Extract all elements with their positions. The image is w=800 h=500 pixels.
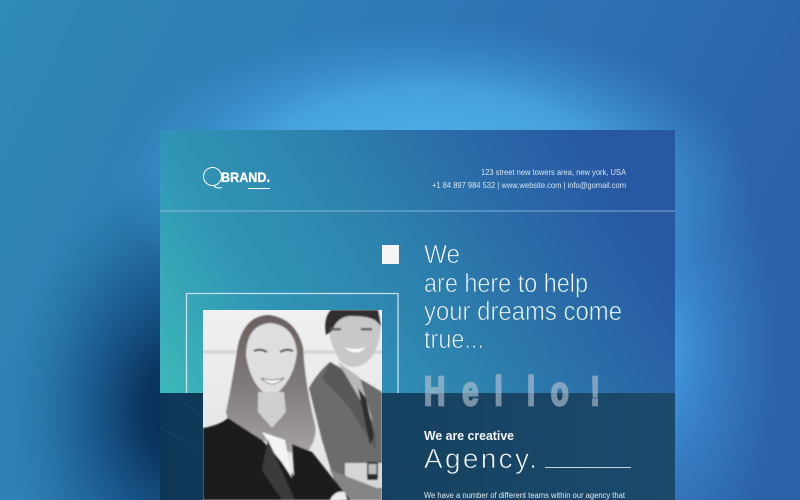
panel: dark lower section (160, 393, 675, 500)
subheading: We are creative (424, 429, 514, 443)
photo: two business people (203, 310, 382, 500)
headline: We (424, 241, 460, 269)
agency title: Agency. (424, 443, 537, 474)
woman (203, 315, 350, 500)
photo frame outline (186, 294, 398, 393)
headline: are here to help (424, 270, 588, 298)
header divider (160, 210, 675, 212)
headline: your dreams come (424, 298, 622, 326)
contact details: +1 84 897 984 532 | www.website.com | info@gomail.com (432, 181, 626, 190)
panel text: agency intro (424, 429, 631, 500)
contact details: 123 street new towers area, new york, USA (481, 168, 627, 177)
white square accent (382, 245, 399, 264)
headline: true... (424, 326, 484, 354)
panel: flyer card (160, 130, 675, 500)
logo: QBrand: BRAND. (221, 170, 270, 185)
Hello! heading: Hello! (424, 368, 600, 414)
headline (424, 241, 622, 354)
contact details (432, 168, 627, 190)
logo: QBrand (204, 168, 270, 189)
agency underline (545, 467, 631, 468)
man (309, 310, 382, 500)
body copy: We have a number of different teams within our agency that (424, 491, 626, 500)
